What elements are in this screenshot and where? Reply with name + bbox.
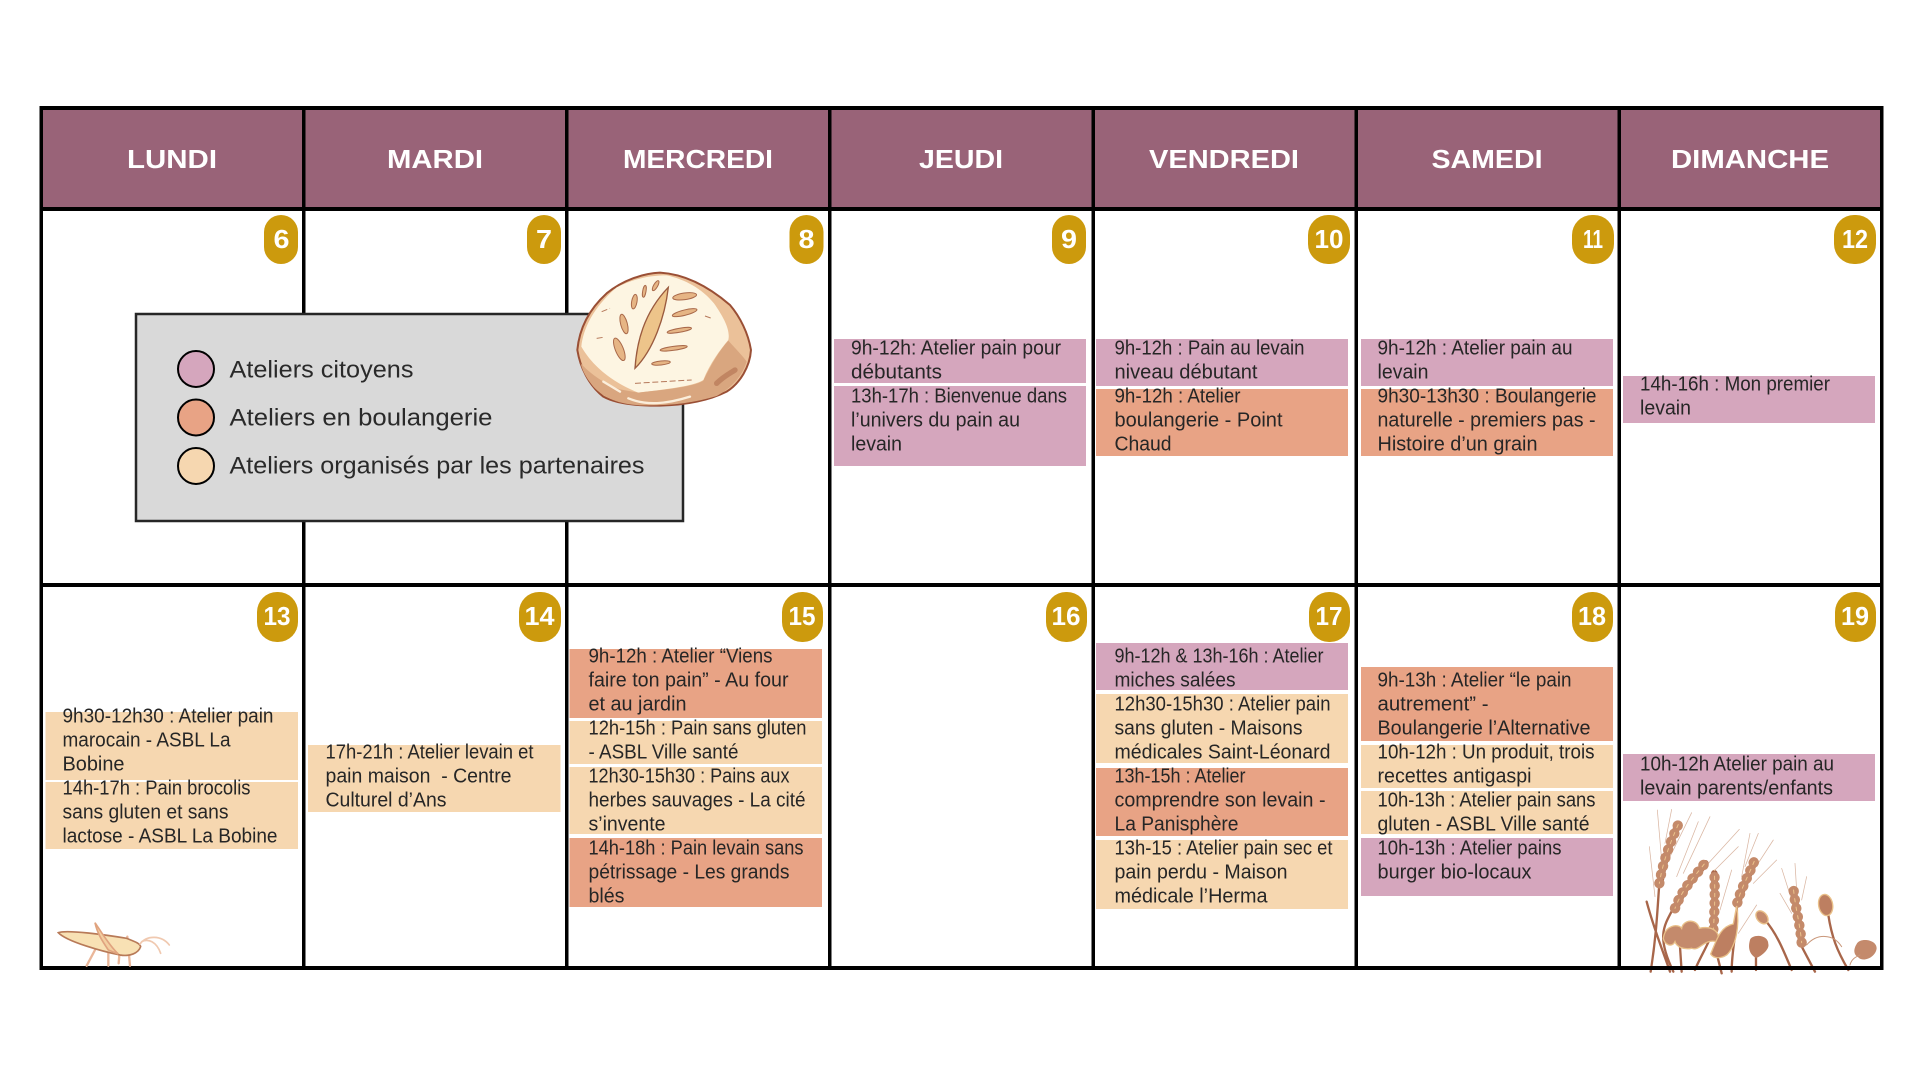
calendar grid	[40, 106, 1884, 970]
date badge 6	[264, 215, 298, 264]
date badge 8: 8	[798, 224, 814, 254]
event: vendredi 17, comprendre son levain: comprendre son levain -	[1114, 790, 1326, 812]
event: vendredi 17, pain sec et pain perdu: pain perdu - Maison	[1114, 862, 1288, 884]
event: vendredi 17, pain sans gluten: médicales Saint-Léonard	[1114, 742, 1330, 764]
event: mardi 14, levain et pain maison: Culturel d’Ans	[326, 790, 446, 812]
event: lundi 13, pain marocain	[46, 706, 298, 780]
event: jeudi 9, bienvenue: 13h-17h : Bienvenue dans	[851, 386, 1067, 408]
event: samedi 18, pain sans gluten: gluten - ASBL Ville santé	[1378, 814, 1590, 836]
event: samedi 18, le pain autrement: autrement” -	[1378, 694, 1488, 716]
date badge 9	[1052, 215, 1086, 264]
event: mercredi 15, pain sans gluten: 12h-15h : Pain sans gluten	[588, 718, 806, 740]
wheat ears	[1661, 826, 1801, 940]
event: mercredi 15, viens faire ton pain: et au jardin	[588, 694, 686, 716]
event: mercredi 15, viens faire ton pain: faire ton pain” - Au four	[588, 670, 789, 692]
date badge 18	[1572, 592, 1613, 642]
header band: days of the week	[41, 108, 1882, 209]
date badge 8	[790, 215, 824, 264]
event: samedi 11, pain au levain: levain	[1378, 362, 1428, 384]
flowers and buds	[1663, 921, 1718, 949]
event: vendredi 17, pain sans gluten	[1096, 694, 1348, 764]
event: vendredi 17, pain sec et pain perdu	[1096, 838, 1348, 909]
event: samedi 18, pains burger	[1361, 838, 1613, 896]
date badge 16: 16	[1052, 601, 1080, 631]
heading: mercredi: MERCREDI	[623, 144, 773, 174]
date badge 10: 10	[1314, 224, 1344, 254]
event: vendredi 10, pain au levain: 9h-12h : Pain au levain	[1114, 338, 1304, 360]
event: dimanche 19, parents/enfants: 10h-12h Atelier pain au	[1640, 754, 1834, 776]
legend panel	[136, 314, 683, 521]
event: jeudi 9, bienvenue: l’univers du pain au	[851, 410, 1020, 432]
date badge 12	[1834, 215, 1876, 264]
event: vendredi 17, comprendre son levain: 13h-15h : Atelier	[1114, 766, 1246, 788]
event: mercredi 15, viens faire ton pain	[570, 646, 822, 718]
event: mardi 14, levain et pain maison	[308, 742, 560, 812]
event: vendredi 17, comprendre son levain: La Panisphère	[1114, 814, 1238, 836]
date badge 10	[1308, 215, 1350, 264]
heading: jeudi: JEUDI	[919, 144, 1003, 174]
event: jeudi 9, bienvenue: levain	[851, 434, 902, 456]
event: samedi 18, le pain autrement: 9h-13h : Atelier “le pain	[1378, 670, 1572, 692]
event: dimanche 12, mon premier levain	[1623, 374, 1875, 423]
event: mercredi 15, pain levain sans pétrissage: blés	[588, 886, 624, 908]
date badge 7: 7	[536, 224, 552, 254]
event: vendredi 17, pain sec et pain perdu: 13h-15 : Atelier pain sec et	[1114, 838, 1333, 860]
event: samedi 11, boulangerie naturelle: 9h30-13h30 : Boulangerie	[1378, 386, 1596, 408]
event: vendredi 17, pain sans gluten: 12h30-15h30 : Atelier pain	[1114, 694, 1330, 716]
date badge 14: 14	[524, 601, 555, 631]
event: samedi 18, le pain autrement	[1361, 667, 1613, 741]
event: samedi 18, le pain autrement: Boulangerie l’Alternative	[1378, 718, 1590, 740]
date badge 13	[257, 592, 298, 642]
event: mercredi 15, herbes sauvages	[570, 766, 822, 836]
event: mercredi 15, pain levain sans pétrissage: 14h-18h : Pain levain sans	[588, 838, 804, 860]
event: samedi 11, pain au levain	[1361, 338, 1613, 386]
event: vendredi 10, pain au levain: niveau débutant	[1114, 362, 1258, 384]
date badge 18: 18	[1578, 601, 1606, 631]
event: vendredi 17, miches salées	[1096, 643, 1348, 692]
date badge 19	[1835, 592, 1876, 642]
event: samedi 11, boulangerie naturelle: Histoire d’un grain	[1378, 434, 1538, 456]
event: mercredi 15, pain sans gluten	[570, 718, 822, 764]
event: vendredi 17, comprendre son levain	[1096, 766, 1348, 836]
event: lundi 13, pain brocolis: sans gluten et sans	[62, 802, 228, 824]
event: lundi 13, pain marocain: marocain - ASBL La	[62, 730, 231, 752]
event: mardi 14, levain et pain maison: pain maison - Centre	[326, 766, 512, 788]
event: lundi 13, pain marocain: Bobine	[62, 754, 124, 776]
illustration: bread loaf	[577, 273, 751, 406]
date badge 15: 15	[788, 601, 816, 631]
event: samedi 18, recettes antigaspi	[1361, 742, 1613, 788]
event: mercredi 15, herbes sauvages: 12h30-15h30 : Pains aux	[588, 766, 790, 788]
date badge 11: 11	[1583, 224, 1603, 254]
event: mercredi 15, herbes sauvages: s’invente	[588, 814, 666, 836]
event: samedi 11, pain au levain: 9h-12h : Atelier pain au	[1378, 338, 1572, 360]
legend item: ateliers partenaires	[178, 448, 644, 484]
event: dimanche 19, parents/enfants	[1623, 754, 1875, 801]
date badge 16	[1046, 592, 1087, 642]
event: mercredi 15, herbes sauvages: herbes sauvages - La cité	[588, 790, 806, 812]
date badge 9: 9	[1061, 224, 1077, 254]
event: mercredi 15, pain levain sans pétrissage: pétrissage - Les grands	[588, 862, 790, 884]
event: samedi 18, pains burger: burger bio-locaux	[1378, 862, 1532, 884]
event: jeudi 9, pain pour débutants: 9h-12h: Atelier pain pour	[851, 338, 1061, 360]
legend item: ateliers citoyens: Ateliers citoyens	[230, 356, 414, 384]
event: lundi 13, pain brocolis: lactose - ASBL La Bobine	[62, 826, 278, 848]
event: mardi 14, levain et pain maison: 17h-21h : Atelier levain et	[326, 742, 534, 764]
event: jeudi 9, pain pour débutants	[834, 338, 1086, 384]
event: mercredi 15, pain sans gluten: - ASBL Ville santé	[588, 742, 738, 764]
date badge 17: 17	[1316, 601, 1342, 631]
event: dimanche 19, parents/enfants: levain parents/enfants	[1640, 778, 1833, 800]
event: vendredi 17, miches salées: 9h-12h & 13h-16h : Atelier	[1114, 646, 1324, 668]
event: samedi 18, recettes antigaspi: recettes antigaspi	[1378, 766, 1532, 788]
event: vendredi 10, boulangerie: 9h-12h : Atelier	[1114, 386, 1241, 408]
date badge 17	[1309, 592, 1350, 642]
date badge 12: 12	[1842, 224, 1868, 254]
date badge 14	[519, 592, 561, 642]
event: samedi 11, boulangerie naturelle: naturelle - premiers pas -	[1378, 410, 1596, 432]
legend item: ateliers citoyens	[178, 351, 414, 387]
event: vendredi 10, boulangerie	[1096, 386, 1348, 456]
event: samedi 18, pain sans gluten: 10h-13h : Atelier pain sans	[1378, 790, 1596, 812]
date badge 7	[527, 215, 561, 264]
legend item: ateliers en boulangerie: Ateliers en boulangerie	[230, 404, 492, 432]
date badge 6: 6	[274, 224, 290, 254]
date badge 13: 13	[264, 601, 290, 631]
event: dimanche 12, mon premier levain: levain	[1640, 398, 1691, 420]
event: vendredi 10, pain au levain	[1096, 338, 1348, 386]
event: vendredi 10, boulangerie: boulangerie - Point	[1114, 410, 1283, 432]
event: samedi 18, recettes antigaspi: 10h-12h : Un produit, trois	[1378, 742, 1594, 764]
date badge 19: 19	[1841, 601, 1869, 631]
illustration: wheat and flowers	[1647, 809, 1877, 973]
date badge 11	[1572, 215, 1614, 264]
heading: mardi: MARDI	[387, 144, 483, 174]
event: vendredi 10, boulangerie: Chaud	[1114, 434, 1172, 456]
heading: dimanche: DIMANCHE	[1671, 144, 1829, 174]
illustration: grasshopper	[58, 923, 169, 966]
event: lundi 13, pain brocolis: 14h-17h : Pain brocolis	[62, 778, 250, 800]
event: mercredi 15, viens faire ton pain: 9h-12h : Atelier “Viens	[588, 646, 772, 668]
event: samedi 11, boulangerie naturelle	[1361, 386, 1613, 456]
heading: vendredi: VENDREDI	[1149, 144, 1299, 174]
heading: samedi: SAMEDI	[1432, 144, 1542, 174]
event: vendredi 17, pain sans gluten: sans gluten - Maisons	[1114, 718, 1302, 740]
event: vendredi 17, miches salées: miches salées	[1114, 670, 1236, 692]
event: jeudi 9, bienvenue	[834, 386, 1086, 466]
date badge 15	[782, 592, 823, 642]
event: dimanche 12, mon premier levain: 14h-16h : Mon premier	[1640, 374, 1830, 396]
heading: lundi: LUNDI	[127, 144, 217, 174]
event: lundi 13, pain brocolis	[46, 778, 298, 849]
legend item: ateliers en boulangerie	[178, 400, 492, 436]
event: samedi 18, pain sans gluten	[1361, 790, 1613, 836]
event: samedi 18, pains burger: 10h-13h : Atelier pains	[1378, 838, 1562, 860]
event: lundi 13, pain marocain: 9h30-12h30 : Atelier pain	[62, 706, 274, 728]
event: vendredi 17, pain sec et pain perdu: médicale l’Herma	[1114, 886, 1268, 908]
event: jeudi 9, pain pour débutants: débutants	[851, 362, 942, 384]
event: mercredi 15, pain levain sans pétrissage	[570, 838, 822, 908]
legend item: ateliers partenaires: Ateliers organisés par les partenaires	[230, 452, 644, 480]
